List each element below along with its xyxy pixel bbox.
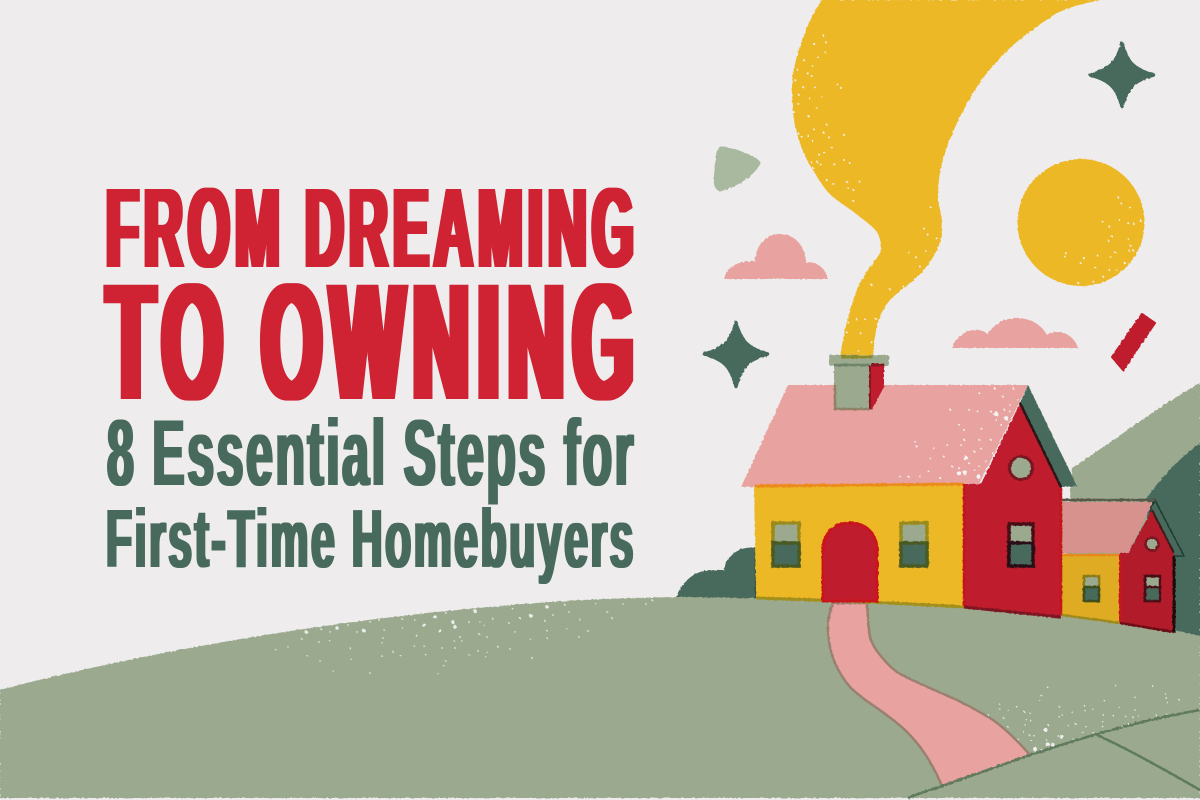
smoke grain bbox=[794, 36, 937, 351]
roof grain bright bbox=[959, 414, 1006, 477]
right window bbox=[901, 523, 927, 566]
gable window bbox=[1009, 524, 1033, 566]
chimney smoke overlap bbox=[841, 356, 873, 358]
chimney side bbox=[870, 363, 884, 409]
foreground hill bbox=[0, 597, 1200, 798]
small house: round window bbox=[1146, 538, 1158, 550]
dark roof edge bbox=[1020, 385, 1077, 487]
main house bbox=[741, 355, 1077, 617]
small house: yellow wall window bbox=[1084, 576, 1099, 601]
small house: red wall window bbox=[1145, 576, 1160, 601]
subtitle bbox=[106, 400, 636, 585]
chimney bbox=[829, 355, 889, 409]
hill grain bright bbox=[306, 607, 547, 632]
icon: sage triangle bbox=[716, 149, 758, 189]
subtitle line 2: First-Time Homebuyers bbox=[106, 492, 636, 585]
icon: red dash bbox=[1112, 314, 1155, 370]
icon: cloud upper bbox=[724, 234, 828, 279]
main roof bbox=[741, 385, 1028, 487]
chimney body bbox=[834, 366, 870, 409]
ground grain bright bbox=[1035, 730, 1062, 749]
left window bbox=[773, 523, 799, 566]
hill: sage bbox=[1060, 383, 1200, 640]
chimney cap bbox=[829, 355, 889, 366]
yellow wall bbox=[754, 484, 964, 607]
icon: sparkle top right bbox=[1090, 44, 1154, 106]
door bbox=[823, 523, 877, 601]
text: FROM DREAMING bbox=[106, 165, 639, 291]
back hills bbox=[1060, 383, 1200, 640]
gable round window bbox=[1010, 456, 1032, 480]
small house: dark roof edge bbox=[1150, 500, 1184, 556]
small house bbox=[1060, 500, 1184, 632]
small house: red gable bbox=[1120, 510, 1174, 632]
icon: chimney smoke bbox=[792, 0, 1100, 358]
icon: cloud lower bbox=[952, 318, 1078, 348]
small house: yellow wall bbox=[1062, 555, 1120, 623]
roof grain bbox=[900, 388, 1018, 483]
icon: bush bbox=[675, 547, 758, 600]
ground grain bbox=[988, 686, 1179, 750]
path to door bbox=[828, 603, 1030, 786]
ground lines bbox=[908, 710, 1200, 798]
small house: pink roof bbox=[1061, 502, 1153, 553]
red gable bbox=[964, 403, 1061, 617]
title bbox=[106, 165, 642, 435]
subtitle line 1: 8 Essential Steps for bbox=[107, 400, 636, 505]
icon: sun bbox=[1018, 159, 1144, 286]
icon: sparkle left bbox=[704, 322, 768, 386]
sun grain bbox=[1065, 197, 1141, 283]
hill: dark green bbox=[1147, 443, 1200, 640]
hill grain bbox=[276, 600, 652, 674]
